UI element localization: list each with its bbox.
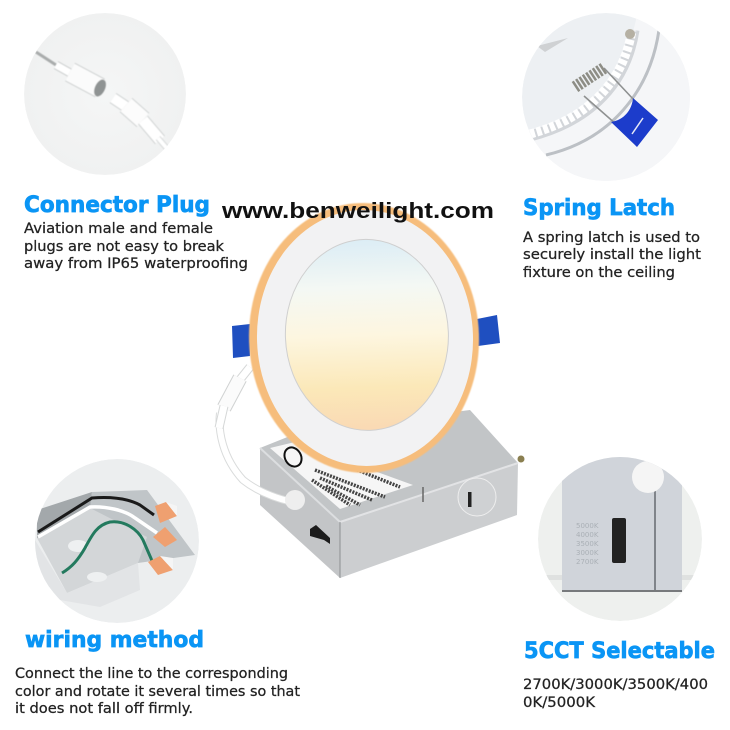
panel: connector plug xyxy=(24,13,248,272)
latch: right xyxy=(477,315,500,346)
photo: wiring method circle xyxy=(35,459,199,623)
photo: connector plug circle xyxy=(24,13,186,175)
photo: CCT switch circle: 3500K xyxy=(576,540,599,548)
latch: left xyxy=(232,324,250,358)
junction box xyxy=(260,410,524,578)
photo: CCT switch circle xyxy=(538,457,702,621)
text: spring latch description xyxy=(523,230,702,281)
heading: connector plug: Connector Plug xyxy=(24,193,210,218)
text: spring latch description: fixture on the ceiling xyxy=(523,265,675,281)
text: colour temperature list xyxy=(523,677,708,711)
text: wiring method description: it does not fall off firmly. xyxy=(15,701,193,717)
photo: CCT switch circle: 4000K xyxy=(576,531,599,539)
heading: spring latch: Spring Latch xyxy=(523,196,675,221)
wire and connector xyxy=(219,367,305,510)
photo: CCT switch circle: 3000K xyxy=(576,549,599,557)
panel: spring latch xyxy=(520,13,702,281)
illustration: recessed light with junction box xyxy=(219,199,524,578)
website url: www.benweilight.com xyxy=(221,198,494,223)
panel: wiring method xyxy=(15,459,301,717)
photo: CCT switch circle: 2700K xyxy=(576,558,599,566)
text: colour temperature list: 2700K/3000K/3500K/400 xyxy=(523,677,708,693)
text: colour temperature list: 0K/5000K xyxy=(523,695,596,711)
light fixture xyxy=(244,199,484,477)
photo: CCT switch circle: 5000K xyxy=(576,522,599,530)
photo: spring latch circle xyxy=(520,13,695,185)
panel: 5CCT selectable xyxy=(523,450,715,711)
text: wiring method description: color and rotate it several times so that xyxy=(15,684,301,700)
text: connector plug description: Aviation male and female xyxy=(24,221,213,237)
heading: 5CCT selectable: 5CCT Selectable xyxy=(524,639,715,664)
text: connector plug description xyxy=(24,221,248,272)
text: wiring method description xyxy=(15,666,301,717)
text: spring latch description: A spring latch is used to xyxy=(523,230,700,246)
text: connector plug description: away from IP65 waterproofing xyxy=(24,256,248,272)
text: connector plug description: plugs are not easy to break xyxy=(24,239,225,255)
heading: wiring method: wiring method xyxy=(25,628,204,653)
text: spring latch description: securely install the light xyxy=(523,247,702,263)
text: wiring method description: Connect the line to the corresponding xyxy=(15,666,288,682)
